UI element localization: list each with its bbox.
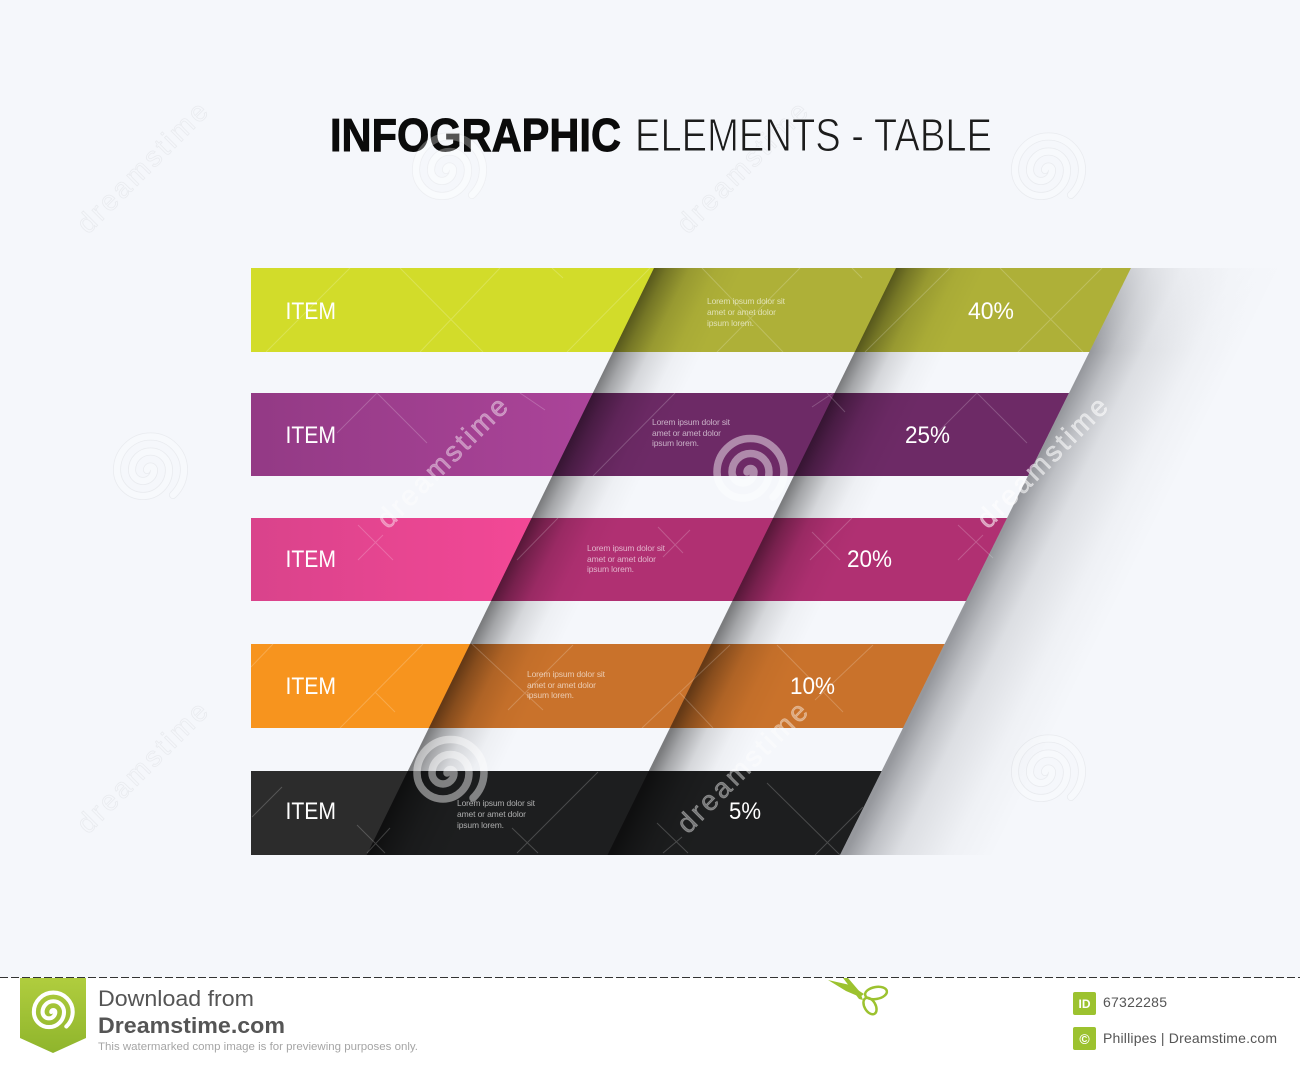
row descriptions: Lorem ipsum dolor sit (707, 296, 786, 306)
row descriptions: Lorem ipsum dolor sit (652, 417, 731, 427)
watermark spirals over table (417, 438, 784, 799)
row labels (286, 298, 336, 825)
row labels: ITEM (286, 798, 336, 825)
fold shadow 1 (367, 268, 764, 855)
footer download text: This watermarked comp image is for previewing purposes only. (98, 1041, 418, 1053)
row 5: black (251, 771, 882, 855)
row labels: ITEM (286, 298, 336, 325)
percentages: 20% (847, 546, 892, 573)
row labels: ITEM (286, 673, 336, 700)
footer download text (98, 986, 418, 1053)
row descriptions: amet or amet dolor (707, 307, 776, 317)
title: INFOGRAPHIC (330, 109, 621, 161)
row 4: orange (251, 644, 945, 728)
row descriptions: Lorem ipsum dolor sit (527, 669, 606, 679)
fold shadow 3 top fade (1089, 268, 1300, 352)
fold shadow 3 (840, 268, 1300, 855)
icon: id badge: ID (1078, 997, 1091, 1011)
row descriptions: amet or amet dolor (587, 554, 656, 564)
watermark spiral over title (416, 136, 483, 196)
row descriptions: amet or amet dolor (457, 809, 526, 819)
footer download text: Download from (98, 986, 254, 1011)
image id: 67322285 (1103, 994, 1167, 1010)
author credit: Phillipes | Dreamstime.com (1103, 1030, 1277, 1046)
row 2: purple (251, 393, 1069, 476)
row 1: lime (251, 268, 1131, 352)
background watermark wordmarks: dreamstime (670, 96, 814, 239)
row descriptions: ipsum lorem. (707, 318, 754, 328)
watermark wordmarks over table (370, 391, 1114, 839)
row descriptions: amet or amet dolor (527, 680, 596, 690)
icon: dreamstime ribbon (20, 978, 86, 1053)
row descriptions: ipsum lorem. (527, 690, 574, 700)
row descriptions: Lorem ipsum dolor sit (457, 798, 536, 808)
watermark wordmarks over table: dreamstime (970, 391, 1114, 534)
percentages: 5% (729, 798, 761, 825)
watermark wordmarks over table: dreamstime (670, 696, 814, 839)
percentages (729, 298, 1014, 825)
row descriptions: ipsum lorem. (652, 438, 699, 448)
background watermark wordmarks: dreamstime (70, 96, 214, 239)
row descriptions (457, 296, 786, 830)
icon: scissors (828, 978, 888, 1017)
percentages: 25% (905, 422, 950, 449)
row descriptions: amet or amet dolor (652, 428, 721, 438)
percentages: 40% (968, 298, 1014, 325)
row 3: pink (251, 518, 1007, 601)
row descriptions: ipsum lorem. (587, 564, 634, 574)
fold shadow 2 (608, 268, 1006, 855)
footer band (0, 978, 1300, 1066)
row descriptions: Lorem ipsum dolor sit (587, 543, 666, 553)
row labels: ITEM (286, 546, 336, 573)
watermark wordmarks over table: dreamstime (370, 391, 514, 534)
title: ELEMENTS - TABLE (635, 109, 992, 161)
background watermark spirals (117, 136, 1082, 798)
icon: id badge (1073, 992, 1096, 1015)
background watermark wordmarks (70, 96, 814, 839)
footer download text: Dreamstime.com (98, 1013, 285, 1038)
title (330, 109, 992, 161)
icon: copyright badge (1073, 1027, 1096, 1050)
table of five folded rows (251, 268, 1300, 855)
row labels: ITEM (286, 422, 336, 449)
row descriptions: ipsum lorem. (457, 820, 504, 830)
background watermark wordmarks: dreamstime (70, 696, 214, 839)
percentages: 10% (790, 673, 835, 700)
icon: copyright badge: © (1079, 1031, 1090, 1047)
